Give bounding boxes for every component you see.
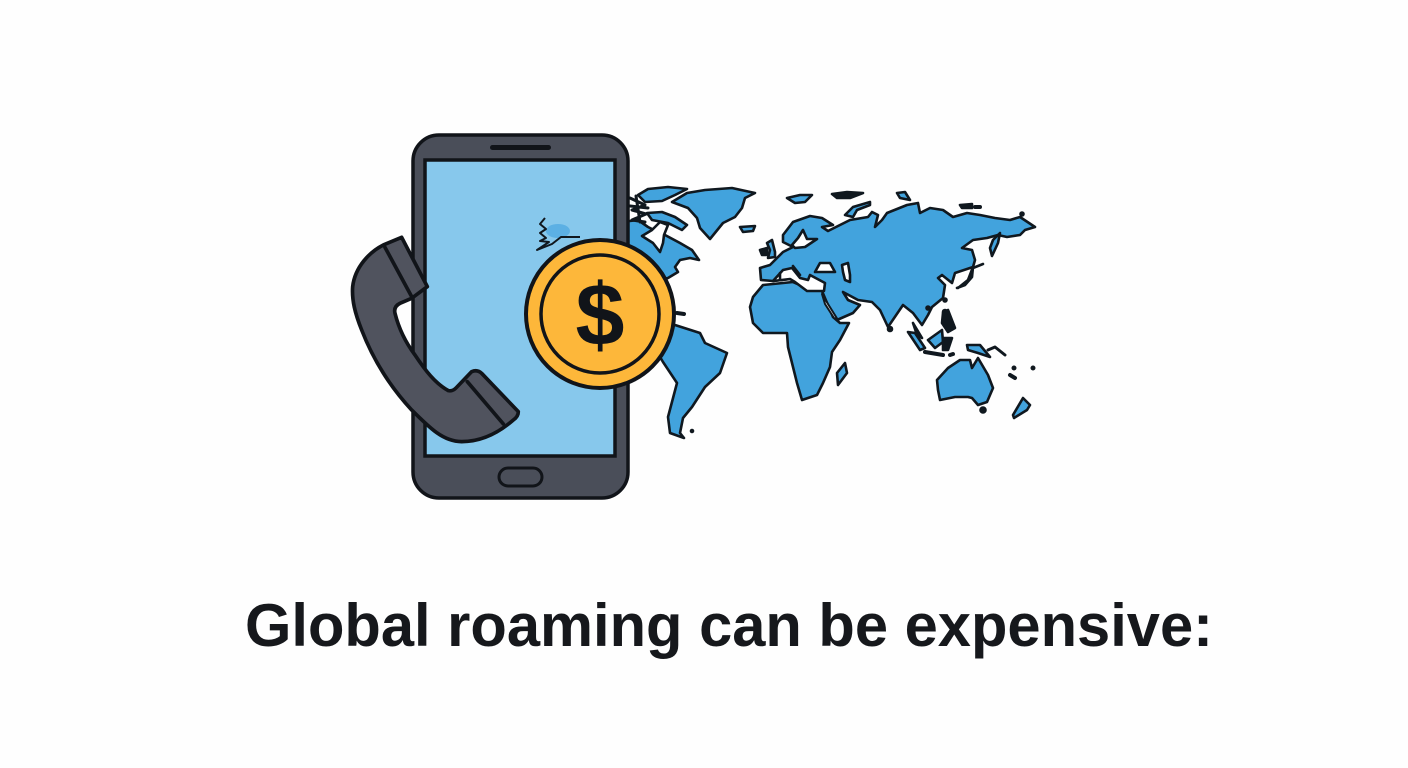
map: Sumatra [908,332,925,350]
map: Sakhalin [990,233,1000,256]
title: Global roaming can be expensive: [245,592,1213,659]
coin outer ring [526,240,674,388]
handset body [352,237,518,442]
map: Arctic islands [638,187,687,230]
icon: dollar coin [526,240,674,388]
map: New Zealand [1013,398,1030,418]
map: South America [650,325,727,438]
map: Africa [750,282,849,400]
handset mouthpiece seam [467,382,503,424]
phone speaker [490,145,551,150]
map: Caspian Sea [842,263,850,282]
map: Eurasia [760,203,1035,327]
map: Svalbard [787,195,812,203]
map: Alaska on screen [537,218,580,250]
map: Italy [780,266,800,280]
map: New Guinea [967,345,990,357]
handset earpiece seam [385,247,412,297]
map: Mediterranean Sea [773,268,825,291]
phone body [413,135,628,498]
dollar sign: $ [576,265,624,364]
map: Hudson Bay [642,222,668,252]
map: Novaya Zemlya [845,202,870,217]
map: Australia [937,358,993,405]
map: dark island chains [677,207,1015,378]
map: Arctic archipelago tangle [630,196,648,222]
world map [622,187,1035,438]
map: Red Sea [822,294,838,320]
map: Severnaya Zemlya [897,192,910,200]
map: Japan [957,264,983,288]
map: Baltic Sea [792,230,817,248]
map: Borneo [928,330,943,348]
smartphone [413,135,628,498]
map: dark small islands [691,192,1034,432]
Alaska coast [537,218,580,250]
map: Greenland [672,188,755,239]
map: Iceland [740,226,755,232]
map: Black Sea [815,263,835,272]
Alaska blue patch [546,224,570,238]
map: United Kingdom [767,240,775,258]
phone screen [425,160,615,456]
map: Melanesian chain [988,347,1005,355]
icon: telephone handset [352,237,518,442]
phone home button [499,468,542,486]
map: Madagascar [837,363,847,385]
map: Ireland [760,248,767,255]
map: Malay Peninsula [913,323,922,338]
map: North America [622,220,699,290]
coin inner ring [541,255,659,373]
